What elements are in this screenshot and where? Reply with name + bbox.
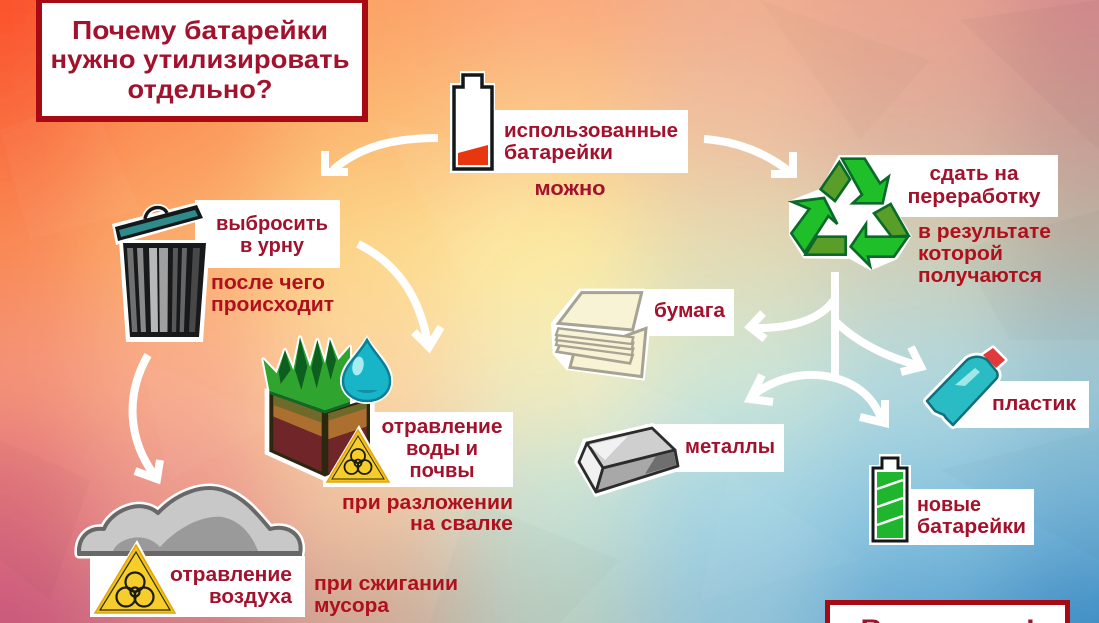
metals label [645, 424, 784, 472]
icon: used battery [450, 71, 495, 173]
text: при разложении на свалке: при разложении [342, 492, 513, 514]
title panel: нужно утилизировать [50, 44, 350, 74]
arrow: battery to recycling [704, 139, 793, 174]
soil label [323, 412, 513, 487]
bin label: в урну [240, 235, 305, 257]
soil label: воды и [406, 438, 478, 460]
icon: stack of paper [552, 289, 650, 380]
icon: metal ingot [574, 423, 682, 497]
metals label: металлы [685, 436, 775, 458]
icon: soil with grass [263, 337, 373, 480]
recycling label: сдать на [930, 163, 1019, 185]
new batteries label: батарейки [917, 516, 1026, 538]
icon: plastic bottle [927, 348, 1005, 425]
title panel: отдельно? [128, 74, 272, 104]
icon: water drop [340, 335, 393, 404]
plastic label: пластик [992, 393, 1077, 415]
text: при сжигании мусора [314, 573, 458, 617]
text: после чего происходит: после чего [211, 272, 325, 294]
soil label: отравление [382, 416, 502, 438]
icon: recycling symbol [790, 156, 911, 269]
text: можно: можно [534, 178, 606, 200]
bottom-right panel [825, 600, 1070, 623]
icon: biohazard triangle air [90, 540, 178, 617]
air label: воздуха [209, 586, 293, 608]
air label [90, 556, 305, 617]
text: при сжигании мусора: при сжигании [314, 573, 458, 595]
title panel: Почему батарейки [72, 15, 328, 45]
arrows: recycling branches [750, 272, 921, 423]
air label: отравление [170, 564, 292, 586]
used batteries: label: батарейки [504, 142, 613, 164]
text: при разложении на свалке [342, 492, 513, 535]
used batteries: label: использованные [504, 120, 678, 142]
bin label: выбросить [216, 213, 328, 235]
arrow: bin to soil [358, 244, 441, 347]
new batteries label [905, 489, 1034, 545]
arrow: battery to bin [325, 138, 438, 172]
text: при разложении на свалке: на свалке [410, 513, 513, 535]
plastic label [955, 381, 1089, 428]
arrow: bin to ash [133, 355, 160, 479]
soil label: почвы [410, 460, 474, 482]
text: в результате которой получаются: которой [918, 243, 1003, 265]
paper label [635, 289, 734, 336]
icon: new battery [869, 454, 911, 545]
icon: biohazard triangle soil [323, 425, 393, 485]
text: в результате которой получаются [918, 221, 1051, 287]
paper label: бумага [654, 300, 726, 322]
new batteries label: новые [917, 494, 981, 516]
recycling label: переработку [908, 186, 1041, 208]
used batteries: label [490, 110, 688, 173]
text: в результате которой получаются: в результате [918, 221, 1051, 243]
text: в результате которой получаются: получаются [918, 265, 1042, 287]
icon: trash bin [112, 202, 210, 342]
recycling label [850, 155, 1058, 217]
icon: ash cloud [78, 488, 302, 556]
text: после чего происходит: происходит [211, 294, 334, 316]
bin label [195, 200, 340, 268]
title panel [39, 0, 365, 119]
text: при сжигании мусора: мусора [314, 595, 390, 617]
text: после чего происходит [211, 272, 334, 316]
